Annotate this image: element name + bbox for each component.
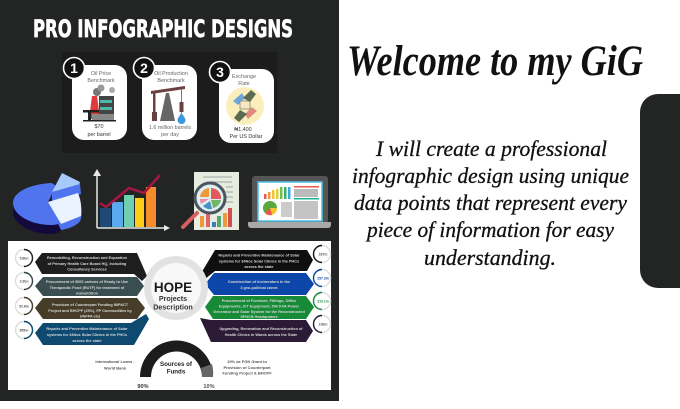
right item 4: Health Clinics in Wards across the State bbox=[225, 333, 297, 337]
left item 4: systems for 34Nos Solar Clinics in the PHCs bbox=[47, 333, 127, 337]
right item 4: Upgrading, Renovation and Reconstruction of bbox=[219, 327, 303, 331]
icon: bar and line chart bbox=[93, 169, 170, 231]
right item 2: Construction of Incinerators in the bbox=[228, 280, 290, 284]
left item 1: Remodelling, Reconstruction and Expantion bbox=[47, 256, 128, 260]
card 1: oil price: Benchmark bbox=[87, 78, 115, 84]
card 2: oil production: Oil Production bbox=[154, 71, 188, 77]
card 3: exchange rate: ₦1,400 bbox=[234, 127, 252, 133]
funding note: loans bbox=[95, 359, 135, 370]
chart: sources of funds arc: Sources of bbox=[160, 361, 193, 368]
number badge 1: 1 bbox=[70, 60, 78, 76]
left item 2: Therapeutic Food (RUTF) for treatment of bbox=[50, 286, 125, 290]
panel: dark portfolio bbox=[0, 0, 339, 401]
number badge 1 bbox=[64, 58, 84, 78]
right item 3: 210.1m bbox=[317, 300, 329, 304]
left item 4: across the state bbox=[73, 339, 101, 343]
card 3: exchange rate: Per US Dollar bbox=[230, 134, 263, 140]
card 3: exchange rate: Exchange bbox=[232, 74, 256, 80]
left item 3: 92.8m bbox=[19, 304, 29, 308]
funding note: loans: International Loans - bbox=[95, 359, 135, 364]
left item 2: 3.3bn bbox=[20, 280, 28, 284]
right item 2 bbox=[205, 270, 330, 295]
text block: description: data points that represent every bbox=[354, 190, 627, 215]
number badge 3 bbox=[210, 62, 230, 82]
right item 1 bbox=[200, 246, 330, 279]
chart: sources of funds arc bbox=[137, 340, 215, 390]
HOPE central circle: Description bbox=[153, 302, 193, 312]
right item 1: across the state bbox=[245, 265, 273, 269]
left item 4: Repairs and Preventive Maintenance of Solar bbox=[46, 327, 128, 331]
panel: benchmark cards bbox=[62, 52, 277, 153]
icon: 3D pie chart bbox=[13, 173, 81, 234]
right item 4: 3.8bn bbox=[319, 322, 327, 326]
right item 1: systems for 34Nos Solar Clinics in the PHCs bbox=[219, 260, 299, 264]
left item 4: 855m bbox=[20, 328, 28, 332]
icon: laptop dashboard bbox=[248, 176, 331, 228]
right item 2: 3 geo-political zones bbox=[240, 286, 278, 290]
card 3: exchange rate bbox=[219, 69, 274, 143]
card 1: oil price bbox=[72, 65, 127, 140]
text block: description: understanding. bbox=[424, 245, 556, 270]
HOPE central circle: HOPE bbox=[154, 280, 192, 295]
right item 3 bbox=[205, 292, 330, 319]
left item 3: UNFPA etc) bbox=[80, 314, 101, 318]
right item 3: Procurement of Furniture, Fittings, Office bbox=[222, 299, 296, 303]
left item 3 bbox=[16, 298, 145, 319]
card 2: oil production bbox=[142, 65, 197, 140]
number badge 2 bbox=[134, 58, 154, 78]
HOPE central circle: Projects bbox=[159, 294, 187, 303]
card 3: exchange rate: Rate bbox=[238, 81, 250, 87]
decorative dark tab bbox=[640, 94, 680, 288]
number badge 2: 2 bbox=[140, 60, 148, 76]
left item 3: Project and BHCPF (25%), FP Commodities by bbox=[48, 309, 133, 313]
right item 2: 257.3m bbox=[317, 276, 329, 280]
icon: refinery bbox=[83, 84, 116, 122]
card 2: oil production: 1.6 million barrels bbox=[149, 125, 191, 131]
left item 2 bbox=[16, 272, 144, 296]
text block: description: piece of information for easy bbox=[365, 217, 614, 242]
left item 1: of Primary Health Care Board HQ, Including bbox=[48, 262, 127, 266]
title: PRO INFOGRAPHIC DESIGNS bbox=[33, 15, 293, 43]
chart: sources of funds arc: 90% bbox=[137, 384, 149, 390]
left item 2: Procurement of 5000 cartons of Ready to Use bbox=[46, 280, 128, 284]
card 1: oil price: Oil Price bbox=[91, 71, 111, 77]
text block: description bbox=[352, 136, 629, 270]
funding note: grant: Funding Project & BHCPF bbox=[222, 370, 272, 376]
right item 4 bbox=[200, 316, 330, 342]
left item 2: malnutrition bbox=[76, 292, 99, 296]
left item 1: 5.8bn bbox=[20, 256, 28, 260]
funding note: grant bbox=[222, 359, 272, 376]
card 2: oil production: Benchmark bbox=[157, 78, 185, 84]
HOPE central circle bbox=[144, 256, 208, 320]
panel: HOPE projects description bbox=[8, 241, 331, 390]
right item 3: Equipments, ICT Equipment, 500 KVA Power bbox=[219, 304, 300, 308]
funding note: grant: Provision of Counterpart bbox=[223, 365, 271, 370]
right item 3: Generator and Solar System for the Reconstructed bbox=[213, 310, 305, 314]
chart: sources of funds arc: Funds bbox=[167, 368, 186, 376]
right item 3: SPHCB Headquaters bbox=[240, 315, 278, 319]
text block: description: I will create a professional bbox=[375, 136, 607, 161]
icon: oil pump bbox=[151, 86, 186, 124]
left item 3: Provision of Counterpart Funding IMPACT bbox=[52, 303, 129, 307]
card 1: oil price: $70 bbox=[94, 124, 104, 130]
funding note: loans: World Bank bbox=[104, 366, 127, 370]
funding note: grant: 10% as FGN Grant to bbox=[227, 359, 267, 364]
icon: report with magnifier bbox=[183, 172, 239, 230]
left item 1 bbox=[16, 250, 147, 281]
card 1: oil price: per barrel bbox=[87, 132, 111, 138]
number badge 3: 3 bbox=[216, 64, 224, 80]
card 2: oil production: per day bbox=[161, 132, 179, 138]
text block: description: infographic design using unique bbox=[352, 163, 629, 188]
icon: currency exchange bbox=[226, 87, 264, 125]
right item 1: 187m bbox=[319, 252, 327, 256]
left item 1: Consultancy Services bbox=[67, 268, 107, 272]
right item 1: Repairs and Preventive Maintenance of Solar bbox=[218, 254, 300, 258]
chart: sources of funds arc: 10% bbox=[203, 384, 215, 390]
left item 4 bbox=[16, 314, 149, 345]
